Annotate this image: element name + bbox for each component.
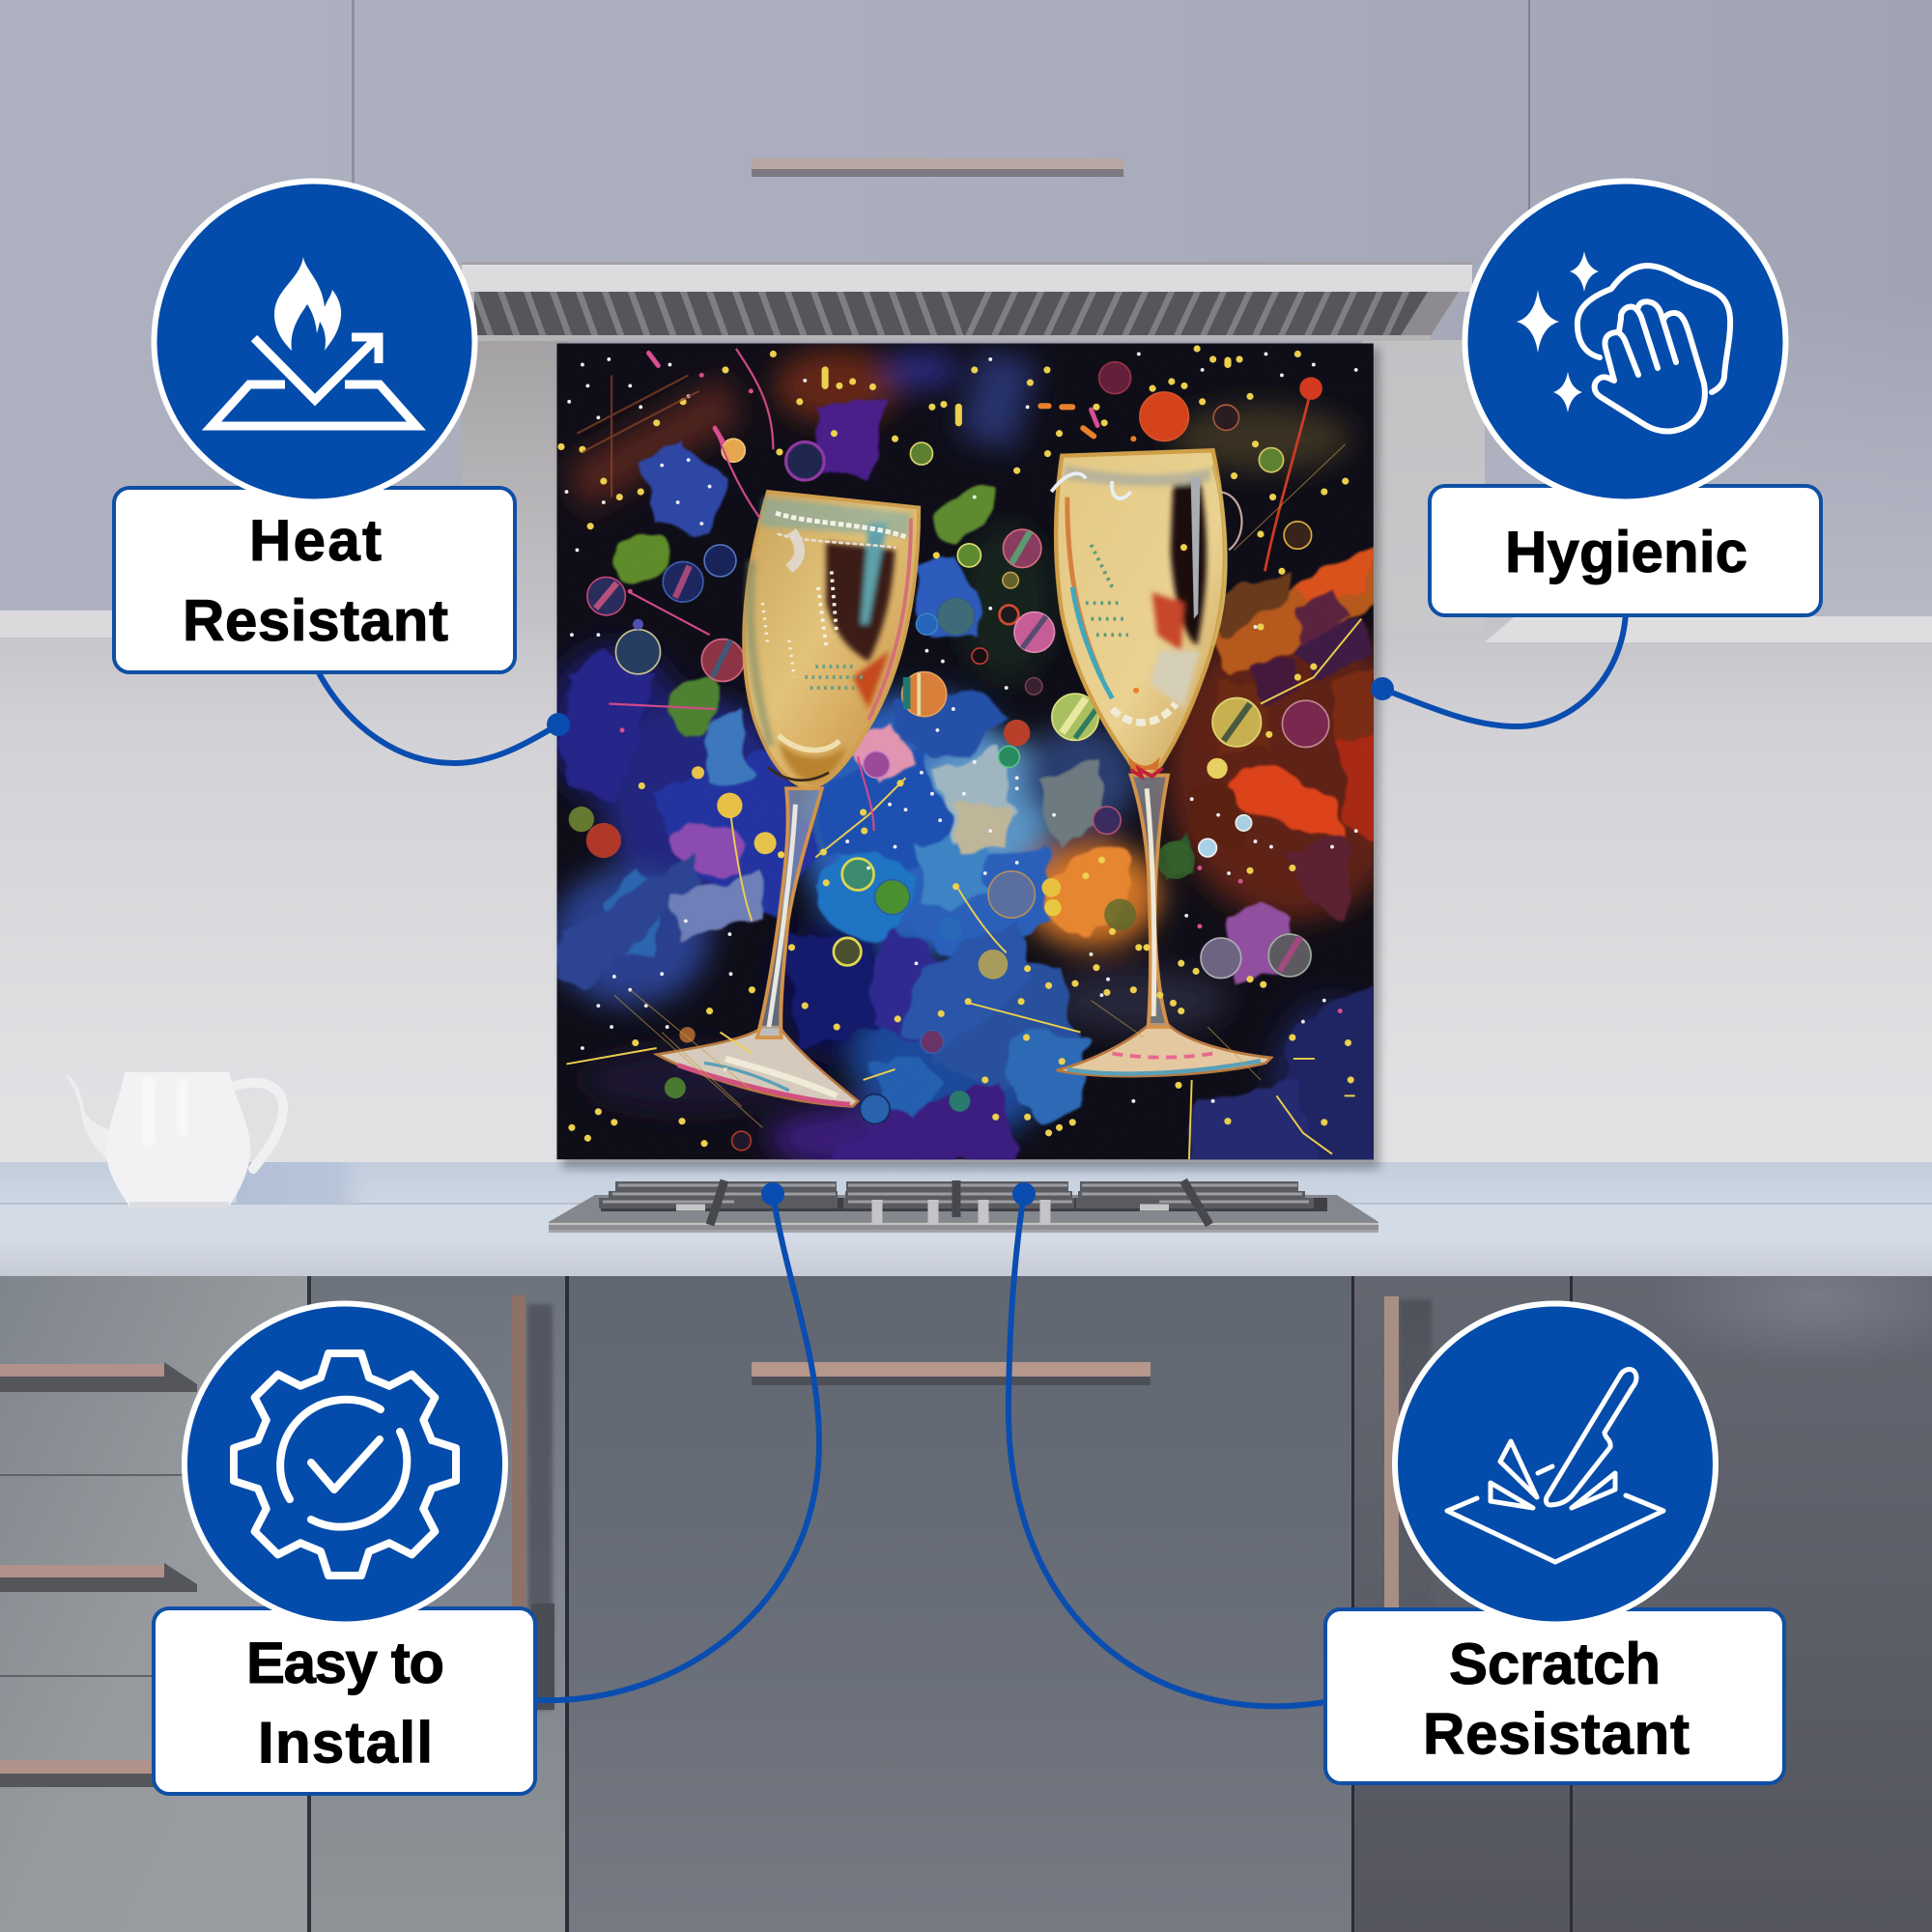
- label text: [183, 508, 448, 653]
- red and pink drips: [1264, 396, 1309, 571]
- connector: hygienic: [1382, 611, 1626, 726]
- drawer handles: [0, 1362, 197, 1787]
- label text: Resistant: [183, 588, 448, 653]
- label text: Hygienic: [1505, 520, 1747, 584]
- badge circle: [1395, 1304, 1716, 1625]
- label text: Heat: [249, 508, 382, 573]
- icon: flame on surface with arrow: [212, 257, 416, 426]
- connector dot: heat resistant: [547, 713, 570, 736]
- centre drawer handle: [752, 1362, 1151, 1385]
- wall: [0, 340, 1932, 1164]
- cabinet under-shelf left: [0, 611, 462, 638]
- soft colour fields: [546, 349, 1420, 1180]
- upper cabinets: [0, 0, 1932, 618]
- label text: Scratch: [1449, 1632, 1661, 1696]
- vertical handle left: [512, 1295, 554, 1710]
- left flute: [657, 492, 919, 1106]
- connector dot: easy to install: [761, 1182, 784, 1206]
- label box: [154, 1608, 535, 1794]
- yellow splatter: [561, 349, 1350, 1144]
- vertical handle right: [1384, 1296, 1432, 1615]
- badge circle: [155, 182, 475, 502]
- bubbles: [569, 362, 1329, 1151]
- label box: [1430, 486, 1821, 615]
- white splatter: [566, 354, 1356, 1101]
- connector: scratch resistant: [1009, 1194, 1325, 1706]
- callout: hygienic: [1430, 182, 1821, 615]
- connector dot: scratch resistant: [1012, 1182, 1036, 1206]
- callout: scratch resistant: [1325, 1304, 1784, 1783]
- label text: [1423, 1632, 1690, 1766]
- label text: Resistant: [1423, 1702, 1690, 1766]
- callout: easy to install: [154, 1304, 535, 1794]
- badge circle: [185, 1304, 505, 1625]
- label box: [114, 488, 515, 672]
- countertop: [0, 1162, 1932, 1276]
- paint strokes: [558, 396, 1378, 1165]
- icon: gear with check mark: [234, 1353, 456, 1576]
- right flute: [1051, 450, 1271, 1076]
- cabinet under-shelf right: [1485, 616, 1932, 642]
- lower cabinets: [0, 1232, 1932, 1932]
- label box: [1325, 1609, 1784, 1783]
- label text: [246, 1631, 444, 1776]
- coloured splatter: [622, 353, 1340, 1011]
- connector: heat resistant: [316, 668, 558, 763]
- gas cooktop: [549, 1180, 1378, 1233]
- upper cabinet handle: [752, 158, 1123, 177]
- callout: heat resistant: [114, 182, 515, 672]
- connector: easy to install: [538, 1194, 819, 1700]
- canvas grain: [557, 343, 1374, 1159]
- pitcher on counter: [65, 1072, 283, 1208]
- badge circle: [1464, 182, 1785, 502]
- label text: Easy to: [246, 1631, 444, 1695]
- connector dot: hygienic: [1371, 677, 1394, 700]
- thin yellow drips: [566, 619, 1361, 1159]
- brush texture: [614, 444, 1346, 1127]
- extractor hood: [462, 262, 1472, 341]
- icon: hand wiping with sparkles: [1517, 251, 1730, 431]
- label text: Install: [258, 1710, 433, 1776]
- icon: knife scratching surface: [1447, 1370, 1663, 1562]
- splashback artwork: champagne flutes: [546, 343, 1420, 1180]
